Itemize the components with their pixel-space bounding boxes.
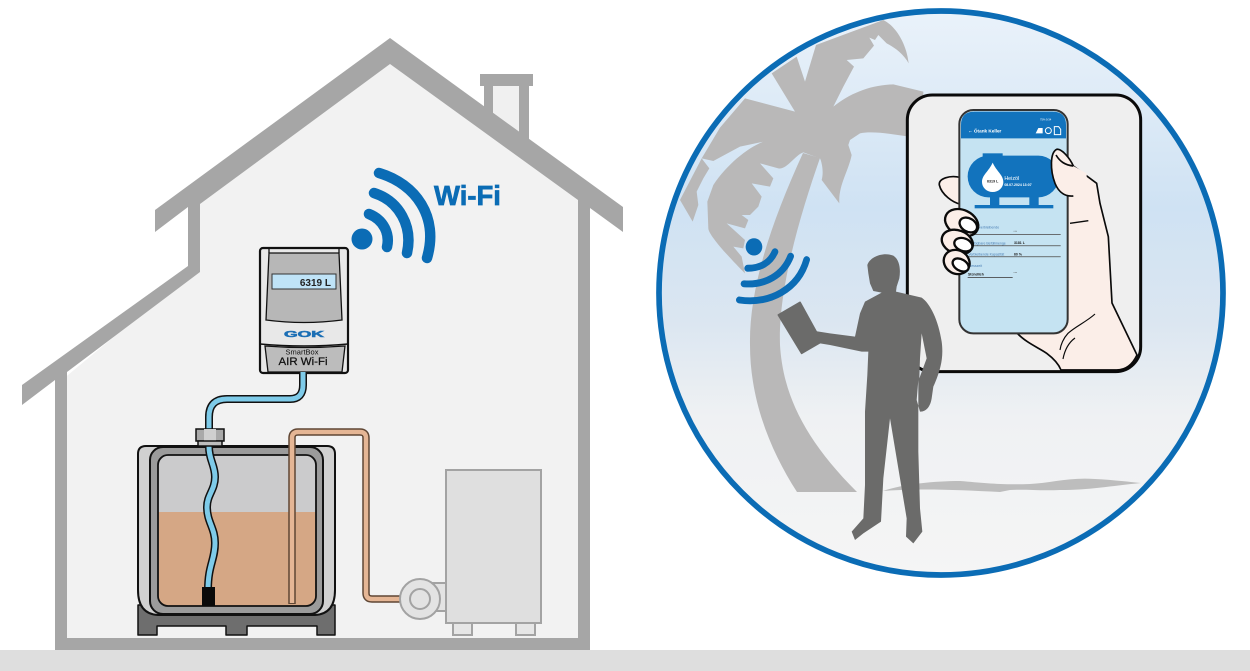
panel border [907,95,1141,372]
oil pipe [292,432,401,604]
meter display: 6319 L [300,278,331,289]
wifi dot [352,228,372,250]
app values: Sicher verbleibende [968,226,999,230]
fuel level [158,512,316,606]
app header [961,112,1066,138]
tank graphic: 08.07.2024 13:07 [1004,183,1032,187]
house walls and roof outline [22,38,623,650]
boiler feet [453,623,472,635]
boiler body [446,470,541,623]
house [22,38,623,650]
app values: ... [1013,227,1017,232]
person with tablet [778,254,942,543]
tank air space [158,455,316,512]
tank [138,446,335,635]
phone panel [907,95,1141,372]
burner [400,579,440,619]
palm tree [680,20,923,492]
app header: 75% 9:34 [1040,117,1052,121]
sensor cable [207,372,303,590]
burner connector [433,583,446,611]
tank graphic: 6319 L [987,180,999,184]
boiler [400,470,541,635]
tank frame [138,446,335,615]
chimney [480,74,533,145]
smartphone [959,110,1068,333]
app values: 3181 L [1014,241,1026,245]
app header: ← Ötank Keller [968,127,1002,133]
tablet [778,302,822,353]
app values: Verbleibende Kapazität [968,252,1004,256]
app values: 60 % [1014,252,1022,256]
tank graphic [968,153,1059,208]
ground shadow [883,479,1141,492]
app values: Stündlich [968,272,984,276]
tank graphic: Heizöl [1004,176,1019,182]
wifi label: Wi-Fi [434,180,501,211]
pallet [138,605,335,635]
floor [0,650,1250,671]
app values: ... [1013,269,1017,274]
remote scene circle [659,11,1223,575]
level sensor [202,587,215,606]
app values [968,226,1061,278]
thumb [1051,149,1095,359]
fingers [938,204,983,279]
wifi signal: house [352,173,430,258]
tank cap [196,429,224,446]
app values: Verfügbare Befüllmenge [968,241,1006,245]
smartbox meter [260,248,348,373]
GOK logo: GOK [284,329,326,339]
rear finger [939,177,960,204]
wifi signal: remote [739,238,807,301]
fuel drop [982,163,1003,192]
circle border [659,11,1223,575]
hand [939,166,1137,370]
person silhouette [815,254,942,543]
app values: Messzeit [968,264,982,268]
house interior [56,50,589,650]
meter label: SmartBox [286,348,319,356]
smartbox meter: AIR Wi-Fi [278,356,328,368]
